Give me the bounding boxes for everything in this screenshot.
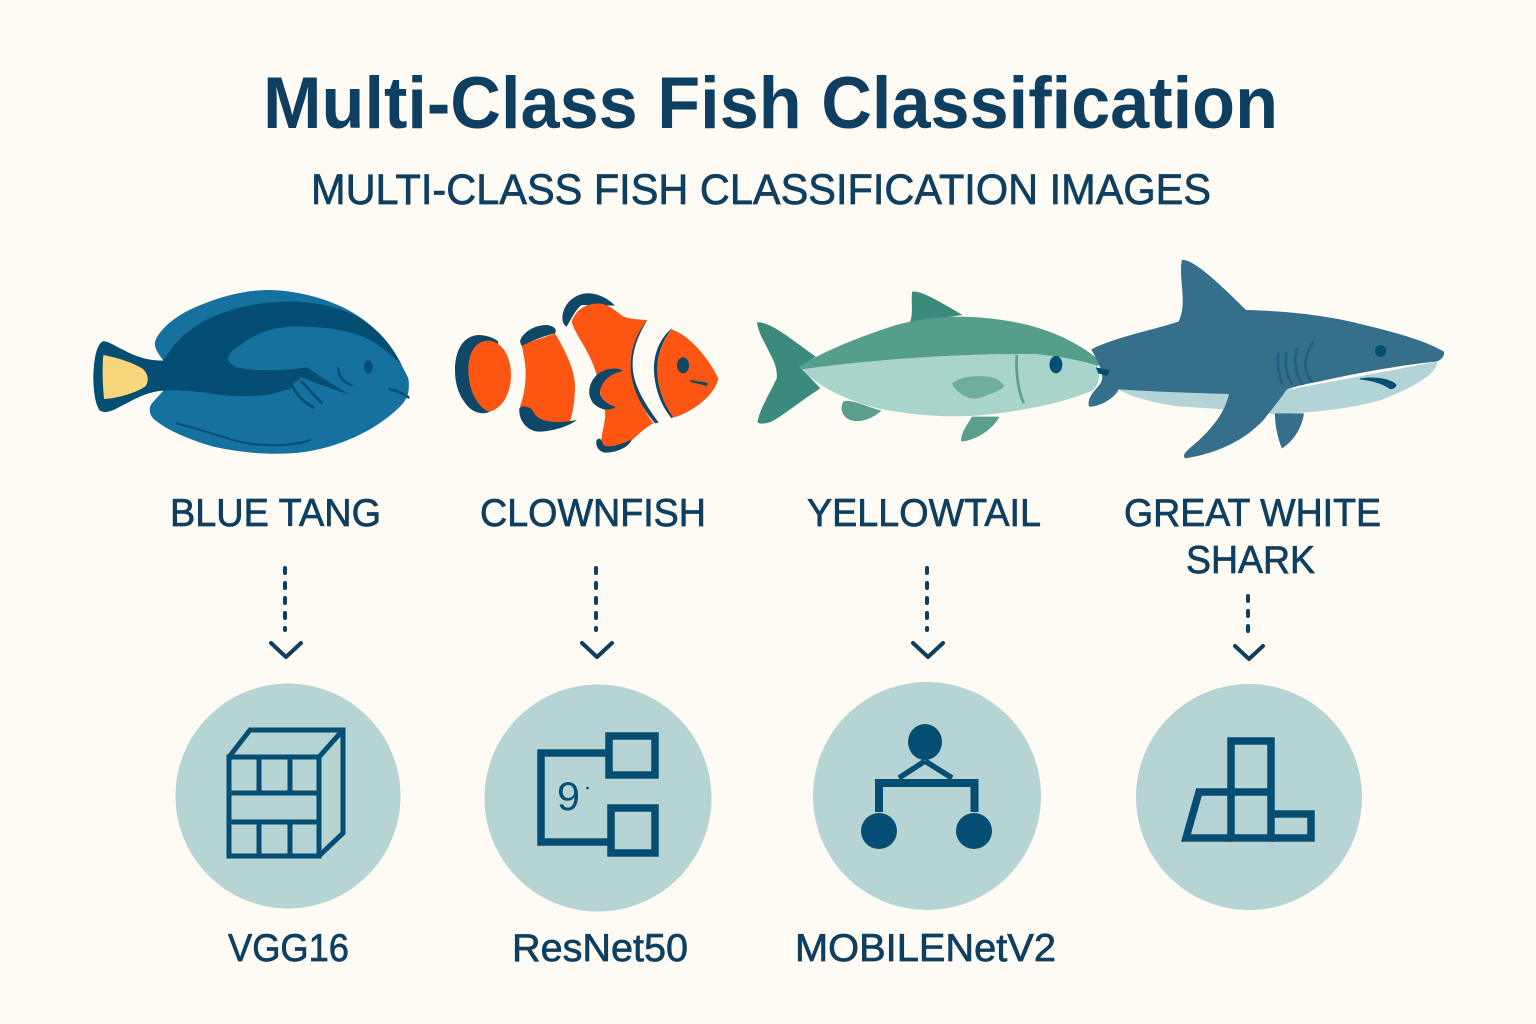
icon: ResNet50 block [484,684,712,912]
icon: clownfish [455,293,718,453]
icon: yellowtail fish [757,292,1103,442]
label: blue tang: BLUE TANG [170,492,381,535]
label: MobileNetV2: MOBILENetV2 [795,927,1056,970]
icon: great white shark [1089,260,1444,458]
arrow: shark to fourth model [1235,596,1263,659]
label: clownfish: CLOWNFISH [480,492,706,535]
icon: ResNet50 block: 9 [557,775,580,819]
title: Multi-Class Fish Classification [263,63,1278,144]
arrow: clownfish to ResNet50 [582,568,612,657]
label: ResNet50: ResNet50 [512,927,688,970]
icon: fourth model blocks [1136,684,1362,910]
label: yellowtail: YELLOWTAIL [807,492,1041,535]
arrow: blue tang to VGG16 [271,568,301,657]
label: VGG16: VGG16 [228,927,349,970]
label: great white shark: SHARK [1186,539,1315,582]
icon: VGG16 network block [176,684,400,908]
subtitle: MULTI-CLASS FISH CLASSIFICATION IMAGES [311,166,1211,214]
arrow: yellowtail to MobileNetV2 [913,568,943,657]
icon: blue tang fish [93,290,409,454]
icon: MobileNetV2 tree [813,682,1041,910]
label: great white shark [1124,492,1381,582]
label: great white shark: GREAT WHITE [1124,492,1381,535]
